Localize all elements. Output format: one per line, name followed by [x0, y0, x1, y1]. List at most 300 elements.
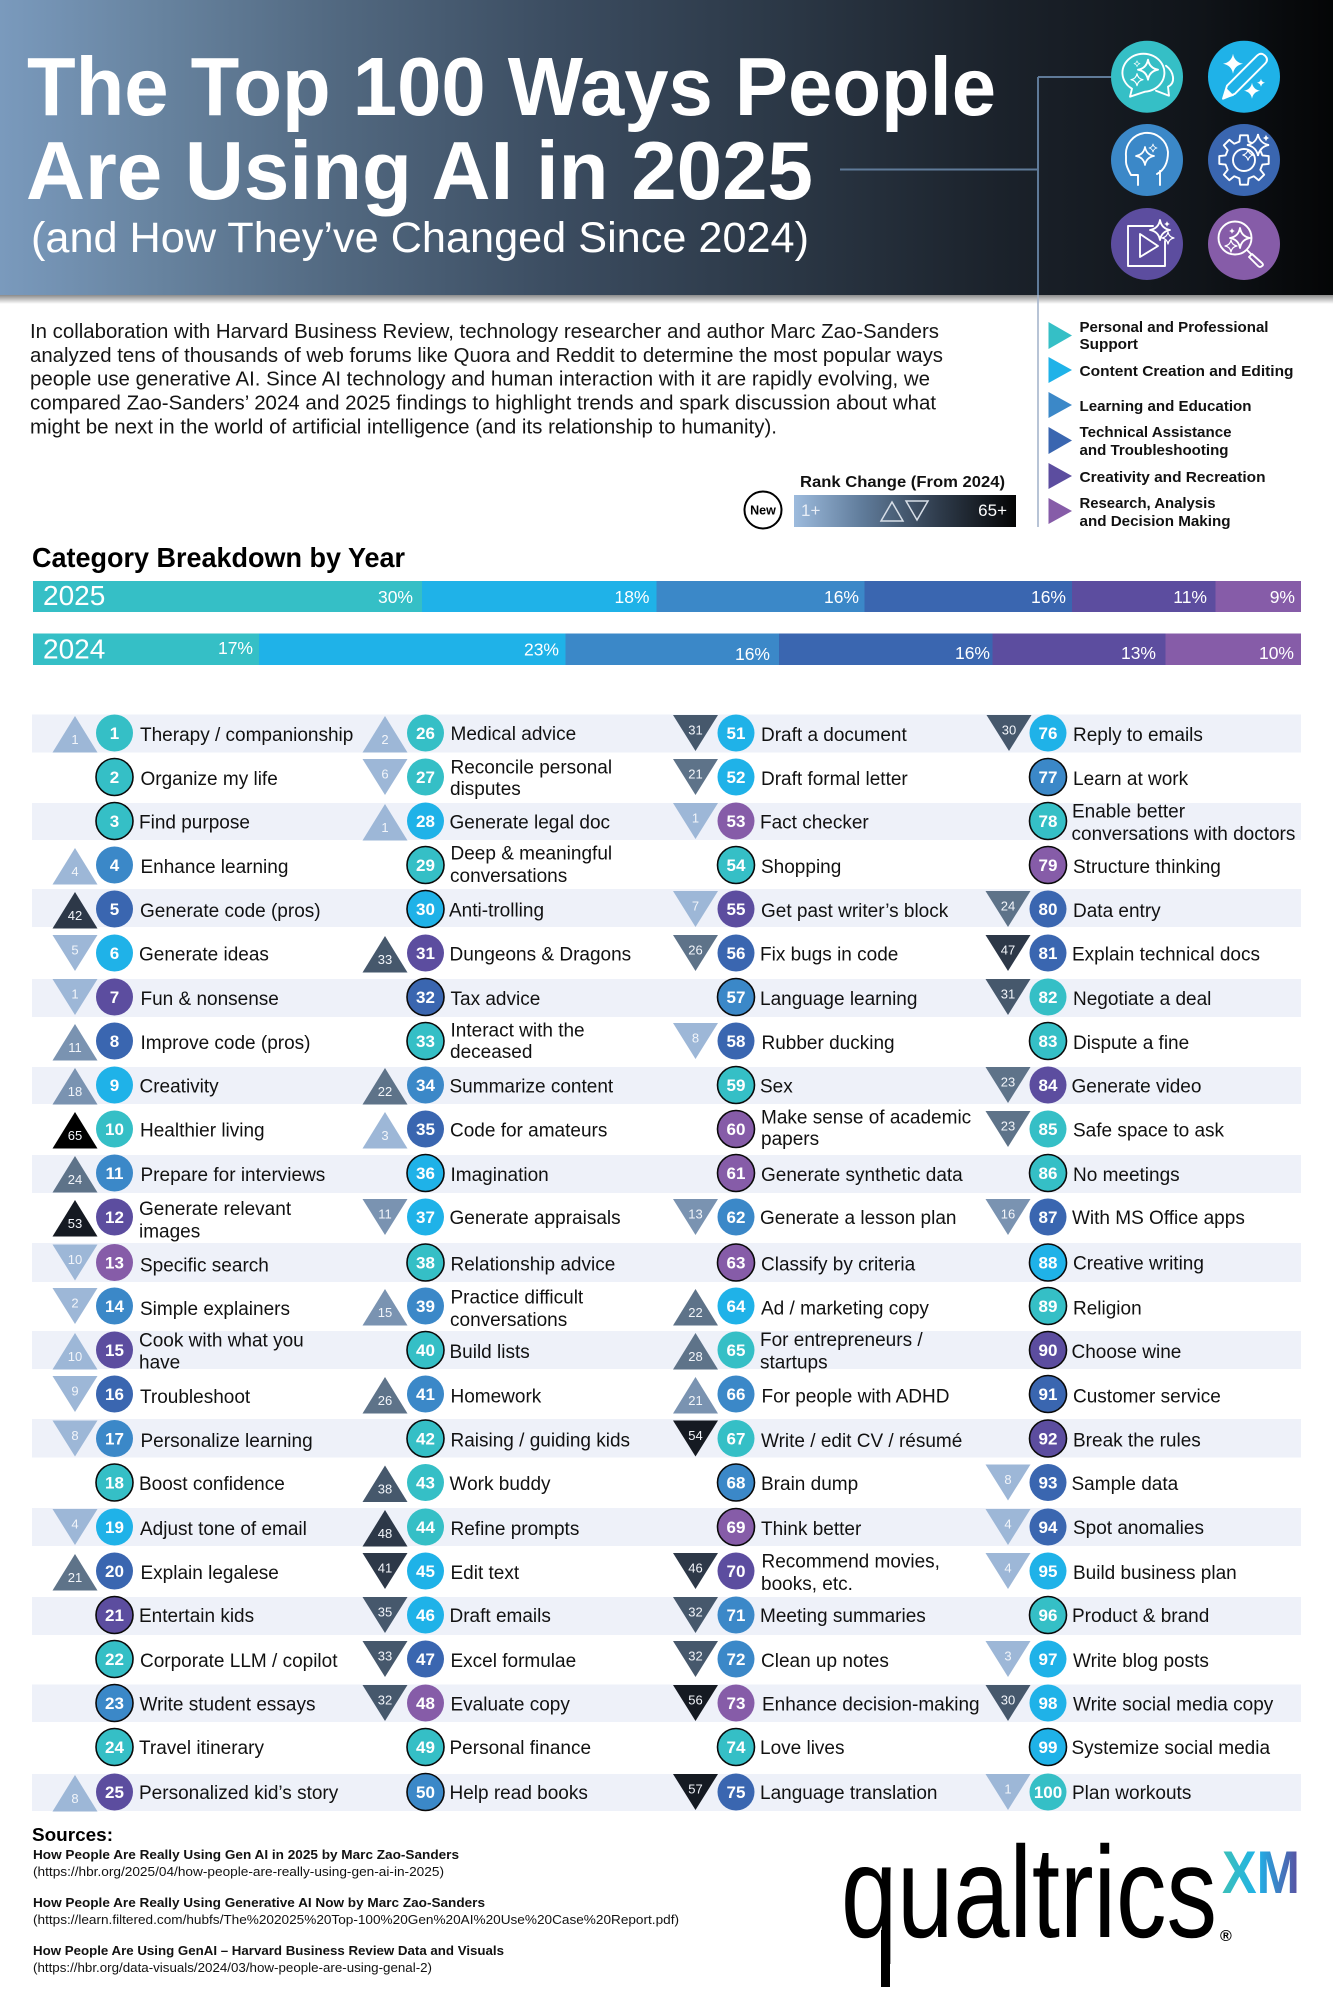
item 79: 79: [1039, 856, 1057, 875]
item 20: 21: [68, 1570, 82, 1585]
item 86: [1030, 1154, 1180, 1192]
source 1: How People Are Really Using Gen AI in 2025 by Marc Zao-Sanders: [33, 1848, 459, 1862]
item 77: [1030, 758, 1189, 796]
item 14: [52, 1288, 290, 1324]
item 65: 65: [727, 1341, 745, 1360]
item 25: 8: [71, 1791, 79, 1806]
item 62: Generate a lesson plan: [760, 1208, 956, 1229]
item 85: Safe space to ask: [1073, 1120, 1225, 1142]
item 19: 19: [105, 1518, 124, 1537]
item 97: 3: [1004, 1648, 1012, 1664]
item 6: [52, 934, 269, 972]
item 28: 28: [416, 812, 435, 831]
item 50: Help read books: [450, 1783, 588, 1804]
item 22: 22: [105, 1650, 124, 1669]
item 88: Creative writing: [1073, 1254, 1204, 1274]
item 91: [1030, 1376, 1221, 1412]
item 49: Personal finance: [450, 1738, 591, 1759]
item 79: Structure thinking: [1073, 857, 1221, 878]
item 17: [52, 1420, 313, 1457]
legend: Technical Assistance and Troubleshooting: and Troubleshooting: [1080, 442, 1228, 459]
ranked list: column 1: [52, 714, 353, 1812]
item 26: Medical advice: [450, 724, 576, 745]
item 3: Find purpose: [139, 812, 250, 834]
item 13: [52, 1244, 269, 1281]
item 29: 29: [416, 856, 435, 875]
legend: Learning and Education: Learning and Education: [1080, 398, 1252, 415]
item 33: deceased: [450, 1042, 532, 1063]
item 59: Sex: [760, 1076, 793, 1098]
item 43: [362, 1464, 551, 1502]
legend: Content Creation and Editing: [1048, 357, 1294, 383]
item 81: 47: [1001, 942, 1015, 958]
rank change key: [744, 474, 1016, 528]
item 35: [362, 1110, 607, 1148]
item 77: 77: [1039, 768, 1057, 787]
item 69: [718, 1508, 862, 1546]
item 62: 13: [688, 1206, 703, 1222]
bar: 2024: 10%: [1259, 643, 1294, 663]
item 52: 52: [727, 768, 745, 787]
item 36: 36: [416, 1164, 435, 1183]
item 8: Improve code (pros): [140, 1033, 311, 1054]
item 28: Generate legal doc: [450, 812, 610, 834]
item 47: Excel formulae: [450, 1651, 576, 1672]
item 96: [1030, 1596, 1209, 1634]
item 23: 23: [105, 1694, 124, 1713]
bar: 2025: 9%: [1270, 587, 1295, 607]
item 24: Travel itinerary: [139, 1738, 264, 1759]
item 77: Learn at work: [1073, 769, 1189, 790]
item 1: 1: [110, 724, 119, 743]
item 46: 46: [416, 1606, 435, 1625]
item 14: Simple explainers: [140, 1299, 290, 1320]
legend: Research, Analysis and Decision Making: Research, Analysis: [1080, 495, 1216, 512]
item 15: have: [139, 1352, 180, 1374]
item 45: 45: [416, 1562, 435, 1581]
item 76: [986, 714, 1203, 752]
item 55: [673, 890, 949, 928]
item 8: [52, 1022, 311, 1060]
item 81: 81: [1039, 944, 1057, 963]
new badge: New: [750, 504, 776, 518]
item 47: 47: [416, 1650, 435, 1669]
item 5: 5: [110, 900, 119, 919]
item 40: 40: [416, 1341, 435, 1360]
item 43: 38: [378, 1482, 392, 1496]
item 16: [52, 1376, 251, 1412]
icon: chat bubbles: [1111, 41, 1183, 113]
item 43: Work buddy: [450, 1474, 551, 1495]
item 76: 76: [1039, 724, 1057, 743]
item 48: [362, 1684, 570, 1722]
source 1: (https://hbr.org/2025/04/how-people-are-really-using-gen-ai-in-2025): [33, 1865, 444, 1879]
item 4: 4: [71, 864, 79, 879]
item 42: [407, 1420, 630, 1457]
item 66: 21: [688, 1393, 703, 1408]
item 65: startups: [760, 1352, 828, 1374]
item 39: [362, 1288, 584, 1331]
item 26: [362, 714, 576, 752]
item 99: [1030, 1728, 1270, 1766]
item 83: 83: [1039, 1032, 1057, 1051]
source 3: How People Are Using GenAI – Harvard Business Review Data and Visuals: [33, 1944, 504, 1958]
item 100: 100: [1034, 1783, 1062, 1802]
item 27: disputes: [450, 779, 521, 800]
qualtrics XM logo: ®: [1220, 1928, 1232, 1945]
item 14: 14: [105, 1297, 124, 1316]
item 67: 67: [727, 1430, 745, 1448]
item 60: 60: [727, 1120, 745, 1139]
item 27: 27: [416, 768, 435, 787]
category legend: [1038, 295, 1294, 530]
bar: 2025: 2025: [43, 580, 105, 611]
item 67: [673, 1420, 962, 1457]
sources: [32, 1825, 679, 1975]
item 30: [407, 890, 544, 928]
item 37: 11: [378, 1206, 392, 1222]
item 58: 8: [692, 1030, 699, 1046]
item 92: [1030, 1420, 1201, 1457]
legend: Research, Analysis and Decision Making: [1048, 495, 1230, 530]
item 31: [362, 934, 631, 972]
item 89: 89: [1039, 1297, 1057, 1316]
item 70: Recommend movies,: [762, 1552, 940, 1572]
ranked list: column 4: [986, 714, 1295, 1810]
item 28: 1: [381, 820, 389, 835]
legend: Research, Analysis and Decision Making: and Decision Making: [1080, 513, 1230, 530]
item 46: [362, 1596, 551, 1634]
item 40: Build lists: [450, 1342, 530, 1363]
item 35: 35: [416, 1120, 435, 1139]
item 13: 10: [68, 1252, 82, 1267]
item 80: 80: [1039, 900, 1057, 919]
item 62: [673, 1198, 956, 1236]
item 21: [96, 1596, 254, 1634]
item 50: [407, 1774, 588, 1810]
item 28: [362, 802, 610, 840]
bar: 2024: 17%: [218, 638, 253, 658]
item 33: [407, 1020, 585, 1063]
item 42: 42: [416, 1430, 435, 1448]
item 94: [986, 1508, 1204, 1546]
item 56: Fix bugs in code: [760, 944, 898, 966]
item 82: 31: [1001, 986, 1015, 1002]
item 74: Love lives: [760, 1738, 844, 1759]
intro paragraph: In collaboration with Harvard Business Review, technology researcher and author Marc Zao-Sanders: [30, 321, 939, 343]
item 54: 54: [727, 856, 746, 875]
item 52: 21: [688, 766, 703, 782]
qualtrics XM logo: XM: [1222, 1839, 1300, 1906]
item 67: 54: [688, 1428, 703, 1443]
sources heading: Sources:: [32, 1825, 113, 1845]
bar: 2025: 30%: [378, 587, 413, 607]
item 8: 11: [68, 1040, 82, 1055]
item 61: 61: [727, 1164, 745, 1183]
item 44: Refine prompts: [450, 1519, 579, 1540]
bar: 2024: 2024: [43, 634, 105, 664]
item 85: [986, 1110, 1225, 1148]
item 85: 85: [1039, 1120, 1057, 1139]
item 58: Rubber ducking: [762, 1033, 895, 1054]
item 6: 5: [71, 942, 79, 958]
item 21: 21: [105, 1606, 124, 1625]
item 15: 10: [68, 1349, 82, 1364]
item 12: 53: [68, 1216, 82, 1231]
item 87: [986, 1198, 1245, 1236]
item 41: 41: [416, 1385, 435, 1404]
item 23: Write student essays: [140, 1694, 316, 1716]
item 71: 71: [727, 1606, 745, 1625]
item 64: 64: [727, 1297, 746, 1316]
item 60: Make sense of academic: [761, 1108, 971, 1128]
item 9: [52, 1066, 219, 1104]
item 89: [1030, 1288, 1142, 1324]
bar: 2025: 16%: [824, 587, 859, 607]
item 63: 63: [727, 1254, 745, 1272]
item 15: 15: [105, 1341, 124, 1360]
item 61: [718, 1154, 963, 1192]
item 36: Imagination: [450, 1165, 549, 1186]
item 90: 90: [1039, 1341, 1057, 1360]
item 84: 23: [1001, 1074, 1015, 1090]
item 51: 51: [727, 724, 745, 743]
bar: 2025: 18%: [614, 587, 650, 607]
gradient scale: [794, 495, 1016, 527]
title: Are Using AI in 2025: [26, 124, 813, 217]
item 79: [1030, 846, 1221, 884]
item 37: 37: [416, 1208, 435, 1227]
item 83: Dispute a fine: [1073, 1033, 1189, 1054]
item 73: [673, 1684, 980, 1722]
item 60: [718, 1108, 971, 1150]
item 12: [52, 1198, 292, 1242]
item 73: 56: [688, 1692, 703, 1708]
item 91: Customer service: [1073, 1386, 1221, 1408]
source 2: (https://learn.filtered.com/hubfs/The%202025%20Top-100%20Gen%20AI%20Use%20Case%20Report.pdf): [33, 1913, 679, 1927]
item 44: 48: [378, 1526, 392, 1541]
item 24: 24: [105, 1738, 124, 1757]
item 18: 18: [105, 1474, 124, 1492]
item 20: 20: [105, 1562, 124, 1581]
item 2: [96, 758, 278, 796]
item 25: 25: [105, 1783, 124, 1802]
item 78: conversations with doctors: [1072, 824, 1295, 845]
row stripes: [32, 714, 1301, 1811]
item 90: Choose wine: [1072, 1342, 1181, 1363]
ranked list: column 3: [673, 714, 980, 1810]
item 26: 26: [416, 724, 435, 743]
item 11: 11: [106, 1164, 123, 1183]
item 56: 26: [688, 942, 703, 958]
legend: Content Creation and Editing: Content Creation and Editing: [1080, 363, 1294, 380]
item 41: [362, 1376, 542, 1414]
item 87: 87: [1039, 1208, 1057, 1227]
item 9: Creativity: [140, 1076, 219, 1098]
item 95: 95: [1039, 1562, 1057, 1581]
item 84: 84: [1039, 1076, 1058, 1095]
intro paragraph: [30, 321, 943, 438]
item 90: [1030, 1332, 1181, 1368]
item 54: Shopping: [761, 857, 841, 878]
item 29: [407, 844, 612, 887]
item 39: Practice difficult: [450, 1288, 584, 1308]
item 32: [407, 978, 540, 1016]
item 1: Therapy / companionship: [140, 725, 353, 746]
item 53: 53: [727, 812, 745, 831]
item 89: Religion: [1073, 1298, 1142, 1320]
legend: Personal and Professional Support: [1048, 319, 1268, 353]
source 1: [33, 1848, 459, 1879]
item 20: [52, 1552, 279, 1590]
item 38: [407, 1244, 615, 1281]
item 22: [96, 1640, 338, 1678]
item 1: [52, 714, 353, 752]
item 93: Sample data: [1072, 1474, 1179, 1495]
item 75: 57: [688, 1782, 703, 1796]
item 57: [718, 978, 917, 1016]
item 82: Negotiate a deal: [1073, 989, 1211, 1010]
item 18: [96, 1464, 285, 1501]
item 9: 18: [68, 1084, 82, 1099]
item 55: 7: [692, 898, 699, 914]
item 98: Write social media copy: [1073, 1694, 1274, 1716]
item 4: 4: [110, 856, 120, 875]
item 67: Write / edit CV / résumé: [761, 1431, 962, 1452]
item 41: 26: [378, 1393, 392, 1408]
icon: pencil: [1208, 41, 1280, 113]
item 78: Enable better: [1072, 802, 1186, 822]
item 36: [407, 1154, 549, 1192]
item 68: 68: [727, 1474, 745, 1492]
bar: 2025: 11%: [1173, 587, 1207, 607]
item 71: [673, 1596, 926, 1634]
item 27: 6: [381, 766, 389, 782]
item 34: 22: [378, 1084, 392, 1099]
legend: Creativity and Recreation: Creativity and Recreation: [1080, 469, 1266, 486]
item 15: Cook with what you: [139, 1330, 304, 1352]
legend: Personal and Professional Support: Support: [1080, 336, 1138, 353]
item 17: Personalize learning: [140, 1431, 313, 1452]
item 11: 24: [68, 1172, 82, 1187]
item 96: Product & brand: [1072, 1606, 1209, 1627]
item 32: 32: [416, 988, 435, 1007]
item 86: 86: [1039, 1164, 1057, 1183]
item 33: 33: [416, 1032, 435, 1051]
item 97: [986, 1640, 1209, 1678]
item 60: papers: [761, 1129, 819, 1150]
item 76: 30: [1002, 722, 1016, 738]
connector lines: [840, 77, 1111, 295]
item 100: 1: [1004, 1782, 1012, 1796]
item 51: 31: [688, 722, 703, 738]
item 86: No meetings: [1073, 1165, 1180, 1186]
item 45: 41: [378, 1560, 392, 1576]
bar: 2024: 13%: [1121, 643, 1156, 663]
item 50: 50: [416, 1783, 435, 1802]
bar: 2024: 16%: [955, 643, 990, 663]
source 3: (https://hbr.org/data-visuals/2024/03/how-people-are-using-genal-2): [33, 1961, 432, 1975]
item 29: conversations: [450, 866, 567, 887]
item 74: 74: [727, 1738, 746, 1757]
item 11: Prepare for interviews: [140, 1165, 325, 1186]
item 27: [362, 758, 612, 800]
item 59: 59: [727, 1076, 745, 1095]
item 16: Troubleshoot: [140, 1387, 251, 1408]
item 29: Deep & meaningful: [450, 844, 612, 864]
item 82: [986, 978, 1211, 1016]
item 71: 32: [688, 1604, 703, 1620]
item 25: Personalized kid’s story: [139, 1783, 339, 1804]
item 98: [986, 1684, 1274, 1722]
item 14: 2: [71, 1296, 79, 1310]
item 27: Reconcile personal: [450, 758, 612, 778]
item 84: Generate video: [1072, 1076, 1201, 1098]
item 87: With MS Office apps: [1072, 1208, 1245, 1229]
item 48: Evaluate copy: [450, 1694, 570, 1716]
item 97: 97: [1039, 1650, 1057, 1669]
item 51: Draft a document: [761, 725, 907, 746]
bar: 2025: [33, 580, 1301, 612]
item 12: Generate relevant: [139, 1199, 292, 1220]
item 10: 65: [68, 1128, 82, 1143]
item 30: 30: [416, 900, 435, 919]
item 71: Meeting summaries: [760, 1606, 926, 1627]
item 15: [52, 1330, 304, 1374]
item 5: 42: [68, 908, 82, 923]
item 46: Draft emails: [450, 1606, 551, 1627]
item 33: Interact with the: [450, 1020, 585, 1042]
item 70: 46: [688, 1560, 703, 1576]
item 75: 75: [727, 1783, 745, 1802]
item 58: [673, 1022, 895, 1060]
item 84: [986, 1066, 1201, 1104]
item 44: [362, 1508, 579, 1546]
item 85: 23: [1001, 1118, 1015, 1134]
item 10: Healthier living: [140, 1120, 265, 1142]
icon: magnifier: [1208, 208, 1280, 280]
item 23: [96, 1684, 316, 1722]
item 59: [718, 1066, 793, 1104]
item 37: [362, 1198, 621, 1236]
item 30: Anti-trolling: [449, 900, 544, 922]
item 31: 33: [378, 952, 392, 967]
item 35: Code for amateurs: [450, 1120, 607, 1142]
intro paragraph: analyzed tens of thousands of web forums like Quora and Reddit to determine the most popular ways: [30, 345, 943, 367]
item 19: 4: [71, 1516, 79, 1532]
item 93: 8: [1004, 1472, 1012, 1487]
item 54: [718, 846, 841, 884]
item 38: Relationship advice: [450, 1254, 615, 1276]
rank key heading: Rank Change (From 2024): [800, 474, 1005, 491]
new badge: [744, 492, 782, 528]
item 16: 16: [105, 1385, 124, 1404]
item 31: Dungeons & Dragons: [450, 944, 631, 966]
item 94: 4: [1004, 1516, 1012, 1532]
item 70: [673, 1552, 940, 1595]
item 88: [1030, 1244, 1204, 1281]
item 62: 62: [727, 1208, 745, 1227]
item 5: [52, 890, 321, 928]
item 69: 69: [727, 1518, 745, 1537]
item 78: 78: [1039, 812, 1057, 831]
item 83: [1030, 1022, 1189, 1060]
item 40: [407, 1332, 530, 1368]
item 64: 22: [688, 1305, 703, 1320]
item 68: [718, 1464, 858, 1501]
item 45: Edit text: [450, 1563, 520, 1584]
item 35: 3: [381, 1128, 389, 1143]
